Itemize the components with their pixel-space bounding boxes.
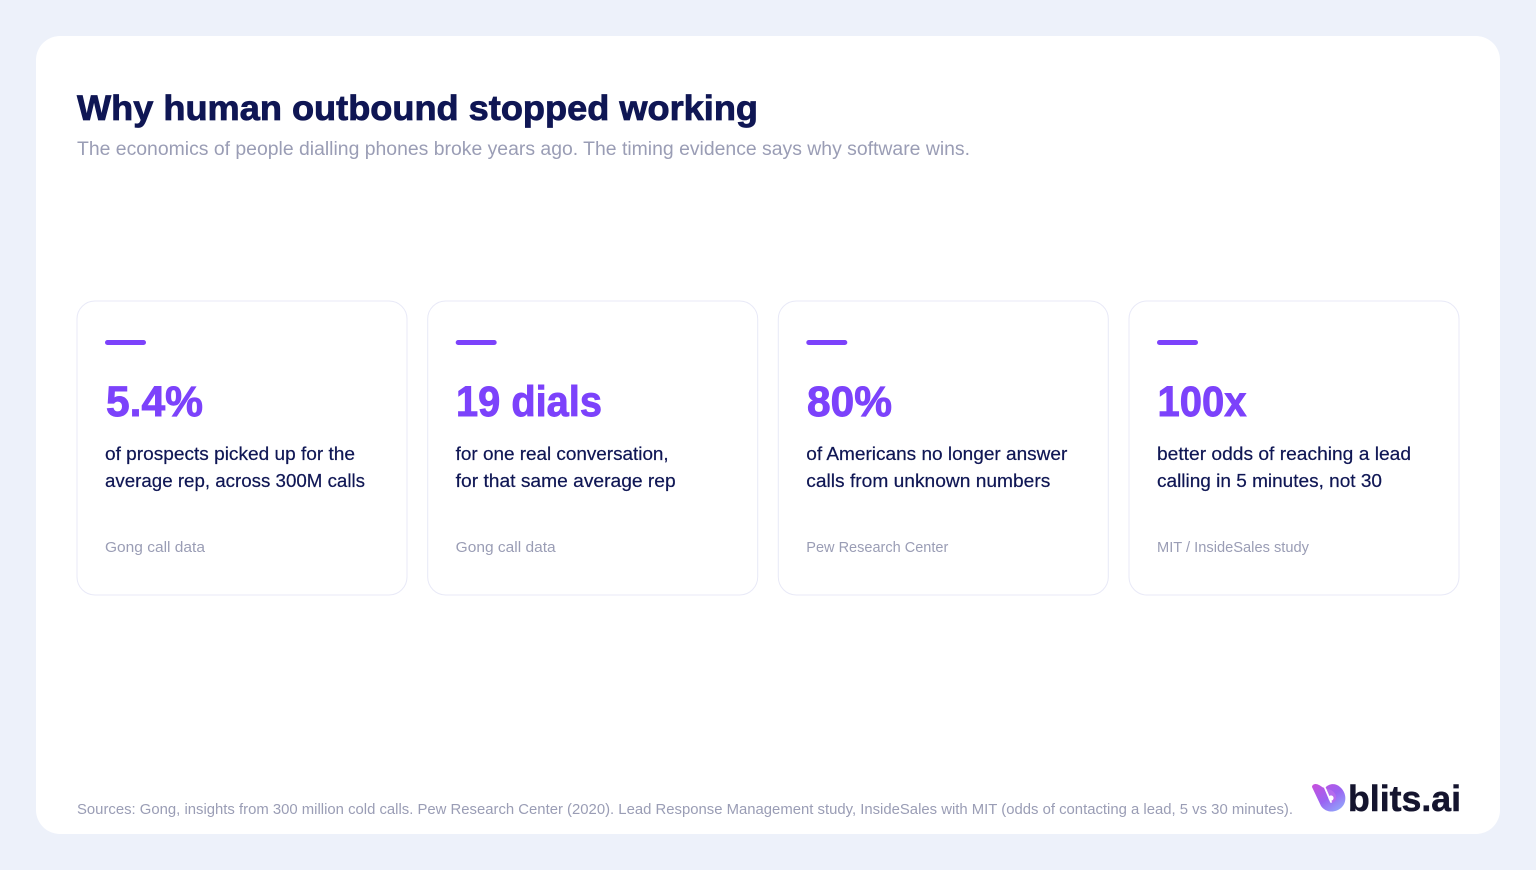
description <box>105 444 365 491</box>
source: Gong call data <box>456 540 557 556</box>
description <box>456 444 676 491</box>
accent bar <box>456 340 497 345</box>
description: calls from unknown numbers <box>806 471 1050 491</box>
description: for that same average rep <box>456 471 676 491</box>
description: of Americans no longer answer <box>806 444 1067 464</box>
stat: 80%: 80% <box>807 378 892 426</box>
accent bar <box>806 340 847 345</box>
source: MIT / InsideSales study <box>1157 540 1310 556</box>
stat: 19 dials: 19 dials <box>456 378 602 426</box>
description: for one real conversation, <box>456 444 669 464</box>
stat: 5.4%: 5.4% <box>106 378 203 426</box>
description <box>806 444 1067 491</box>
description: calling in 5 minutes, not 30 <box>1157 471 1382 491</box>
description: average rep, across 300M calls <box>105 471 365 491</box>
sources footnote: Sources: Gong, insights from 300 million cold calls. Pew Research Center (2020). Lead Response Management study, InsideSales with MIT (odds of contacting a lead, 5 vs 30 minutes). <box>77 802 1293 818</box>
icon: logo mark <box>1312 784 1345 812</box>
panel: 80% stat card <box>778 301 1108 595</box>
source: Pew Research Center <box>806 540 948 556</box>
description: of prospects picked up for the <box>105 444 355 464</box>
wordmark: blits.ai <box>1348 778 1461 819</box>
panel: 100x stat card <box>1129 301 1459 595</box>
subtitle: The economics of people dialling phones broke years ago. The timing evidence says why software wins. <box>77 139 970 160</box>
accent bar <box>1157 340 1198 345</box>
description <box>1157 444 1411 491</box>
panel: 5.4% stat card <box>77 301 407 595</box>
source: Gong call data <box>105 540 206 556</box>
title: Why human outbound stopped working <box>77 89 758 128</box>
accent bar <box>105 340 146 345</box>
panel: 19 dials stat card <box>428 301 758 595</box>
description: better odds of reaching a lead <box>1157 444 1411 464</box>
logo: blits.ai <box>1312 778 1461 819</box>
stat: 100x: 100x <box>1158 378 1247 426</box>
